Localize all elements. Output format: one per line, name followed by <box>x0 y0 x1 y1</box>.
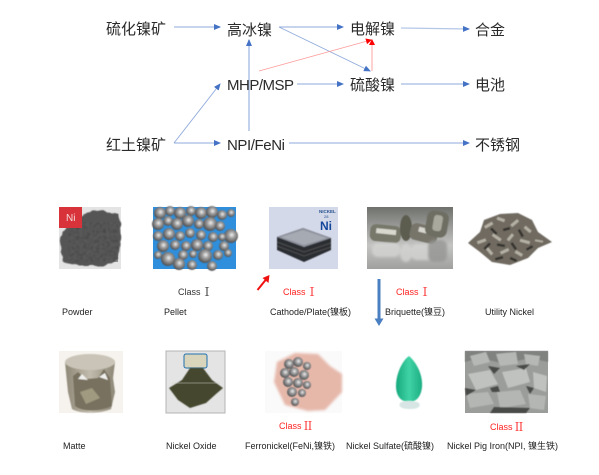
flow node labels: 不锈钢 <box>475 137 520 154</box>
image: powder <box>59 207 121 269</box>
product captions row 1: Powder <box>62 307 93 317</box>
product captions row 1 <box>62 306 534 317</box>
product captions row 2: Nickel Sulfate(硫酸镍) <box>346 440 434 451</box>
class labels: Ⅱ <box>513 420 525 434</box>
image: cathode plate <box>269 207 338 269</box>
icon: Ni label: 28 <box>324 214 329 219</box>
flow node labels: NPI/FeNi <box>227 137 285 154</box>
class labels: Ⅰ <box>306 285 318 299</box>
arrow: red diagonal <box>258 275 270 290</box>
flow node labels: 高冰镍 <box>227 21 272 39</box>
product captions row 2: Nickel Oxide <box>166 441 217 451</box>
icon: Ni label <box>319 209 336 233</box>
image: nickel pig iron <box>465 351 548 413</box>
flow node labels: 电池 <box>475 77 505 94</box>
flow node labels: 硫化镍矿 <box>106 20 166 38</box>
flow node labels: 电解镍 <box>350 20 395 38</box>
image: utility nickel <box>468 213 552 265</box>
flow node labels <box>106 20 520 154</box>
flow node labels: MHP/MSP <box>227 77 294 94</box>
class labels: Ⅰ <box>201 285 213 299</box>
class labels: Ⅰ <box>419 285 431 299</box>
class labels: Class <box>283 287 306 297</box>
class labels: Class <box>490 422 513 432</box>
image: nickel oxide <box>166 351 225 413</box>
image: pellets <box>152 206 238 271</box>
flow node labels: 红土镍矿 <box>106 136 166 154</box>
product captions row 2: Ferronickel(FeNi,镍铁) <box>245 440 335 451</box>
image: nickel sulfate drop <box>396 356 422 409</box>
icon: Ni label: NICKEL <box>319 209 336 214</box>
product captions row 1: Pellet <box>164 307 187 317</box>
icon: Ni label: Ni <box>320 219 332 233</box>
arrows: red connectors <box>259 40 372 71</box>
image: matte <box>59 351 123 413</box>
image: briquettes <box>367 207 453 269</box>
icon: Ni tag: Ni <box>66 213 75 224</box>
arrow: blue down <box>374 279 384 326</box>
class labels: Class <box>178 287 201 297</box>
arrows: blue connectors <box>174 27 469 143</box>
product captions row 2 <box>63 440 558 451</box>
product captions row 1: Cathode/Plate(镍板) <box>270 306 351 317</box>
product captions row 2: Matte <box>63 441 86 451</box>
product captions row 2: Nickel Pig Iron(NPI, 镍生铁) <box>447 440 558 451</box>
flow node labels: 合金 <box>475 22 505 39</box>
flow node labels: 硫酸镍 <box>350 76 395 94</box>
class labels: Ⅱ <box>302 419 314 433</box>
class labels: Class <box>396 287 419 297</box>
product captions row 1: Briquette(镍豆) <box>385 306 445 317</box>
image: ferronickel in hand <box>265 351 342 413</box>
flow diagram <box>106 20 520 154</box>
product captions row 1: Utility Nickel <box>485 307 534 317</box>
class labels: Class <box>279 421 302 431</box>
class labels <box>178 285 525 434</box>
